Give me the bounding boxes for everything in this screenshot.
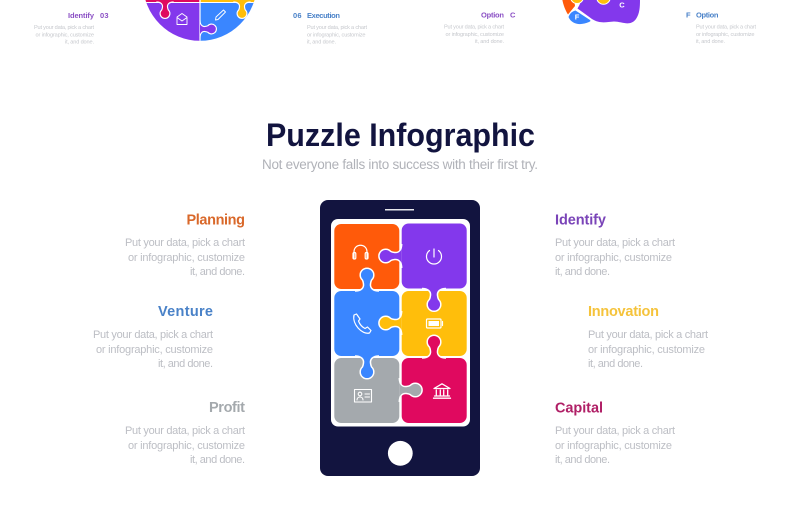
subtitle: Not everyone falls into success with their first try. [262,157,538,172]
puzzle piece: orange [334,224,399,289]
top fragment: puzzle circle [146,0,254,41]
text block: venture: or infographic, customize [96,344,213,356]
text block: innovation: Innovation [588,304,659,320]
top fragment: option F label: or infographic, customize [696,32,754,38]
top fragment: option F label: F [686,10,691,20]
text block: identify: or infographic, customize [555,252,672,264]
knob: purple into yellow [422,288,446,311]
top fragment: organic puzzle blob: F [575,12,580,22]
text block: planning: it, and done. [190,266,245,278]
top fragment: identify label left: or infographic, customize [36,32,94,38]
phone body [320,200,480,476]
text block: venture: Put your data, pick a chart [93,329,213,341]
top fragment: option C label: Option [481,10,504,20]
text block: capital: Put your data, pick a chart [555,425,675,437]
top fragment: execution label: 06 [293,11,302,20]
top fragment: identify label left [34,11,108,46]
text block: venture: Venture [158,304,213,320]
screen [331,219,470,426]
top fragment: identify label left: it, and done. [65,40,94,46]
text block: capital [555,400,675,466]
puzzle piece: crimson [402,358,467,423]
text block: innovation: Put your data, pick a chart [588,329,708,341]
text block: venture [93,304,213,370]
text block: innovation: it, and done. [588,358,643,370]
puzzle piece: purple [402,224,467,288]
top fragment: organic puzzle blob [562,0,640,24]
text block: identify: Identify [555,212,606,228]
knob: blue into orange [355,268,379,291]
icon: headphones [353,245,368,259]
top fragment: option F label: it, and done. [696,39,725,45]
knob: purple into orange [379,244,402,268]
knob: blue into gray [355,356,379,379]
text block: profit: it, and done. [190,454,245,466]
text block: planning: Put your data, pick a chart [125,237,245,249]
text block: profit: Profit [209,400,245,416]
top fragment: execution label: it, and done. [307,40,336,46]
knob: yellow into blue [379,311,402,335]
icon: id card [354,390,372,402]
icon: phone handset [354,314,371,333]
text block: planning [125,212,245,278]
puzzle piece: blue [334,291,399,356]
speaker [385,209,414,210]
top fragment: execution label [293,11,367,46]
text block: identify: Put your data, pick a chart [555,237,675,249]
puzzle piece: yellow [402,291,467,356]
text block: planning: or infographic, customize [128,252,245,264]
icon: power [427,249,442,264]
top fragment: option F label: Put your data, pick a chart [696,24,756,30]
icon: bank [434,384,450,398]
text block: profit: or infographic, customize [128,440,245,452]
top fragment: execution label: Put your data, pick a chart [307,25,367,31]
top fragment: identify label left: Put your data, pick a chart [34,25,94,31]
top fragment: execution label: Execution [307,11,340,20]
puzzle piece: gray [334,358,399,423]
top fragment: option C label: C [510,10,516,20]
top fragment: option F label: Option [696,10,719,20]
icon: envelope [177,14,187,24]
home button [388,441,413,466]
text block: capital: Capital [555,400,603,416]
top fragment: option F label [686,10,756,45]
top fragment: option C label: or infographic, customize [446,32,504,38]
text block: identify: it, and done. [555,266,610,278]
top fragment: organic puzzle blob: C [619,0,625,10]
top fragment: option C label [444,10,516,45]
text block: capital: it, and done. [555,454,610,466]
top fragment: identify label left: 03 [100,11,108,20]
top fragment: option C label: it, and done. [475,39,504,45]
phone with puzzle screen [320,200,480,476]
text block: capital: or infographic, customize [555,440,672,452]
text block: identify [555,212,675,278]
icon: pencil [216,10,226,20]
title: Puzzle Infographic [266,117,535,153]
top fragment: option C label: Put your data, pick a chart [444,24,504,30]
text block: planning: Planning [186,212,245,228]
text block: innovation [588,304,708,370]
top fragment: execution label: or infographic, customize [307,32,366,38]
text block: innovation: or infographic, customize [588,344,705,356]
top fragment: identify label left: Identify [68,11,95,20]
text block: profit [125,400,245,466]
knob: gray into crimson [399,378,422,402]
text block: profit: Put your data, pick a chart [125,425,245,437]
icon: battery [426,319,442,328]
text block: venture: it, and done. [158,358,213,370]
knob: crimson into yellow [422,335,446,358]
